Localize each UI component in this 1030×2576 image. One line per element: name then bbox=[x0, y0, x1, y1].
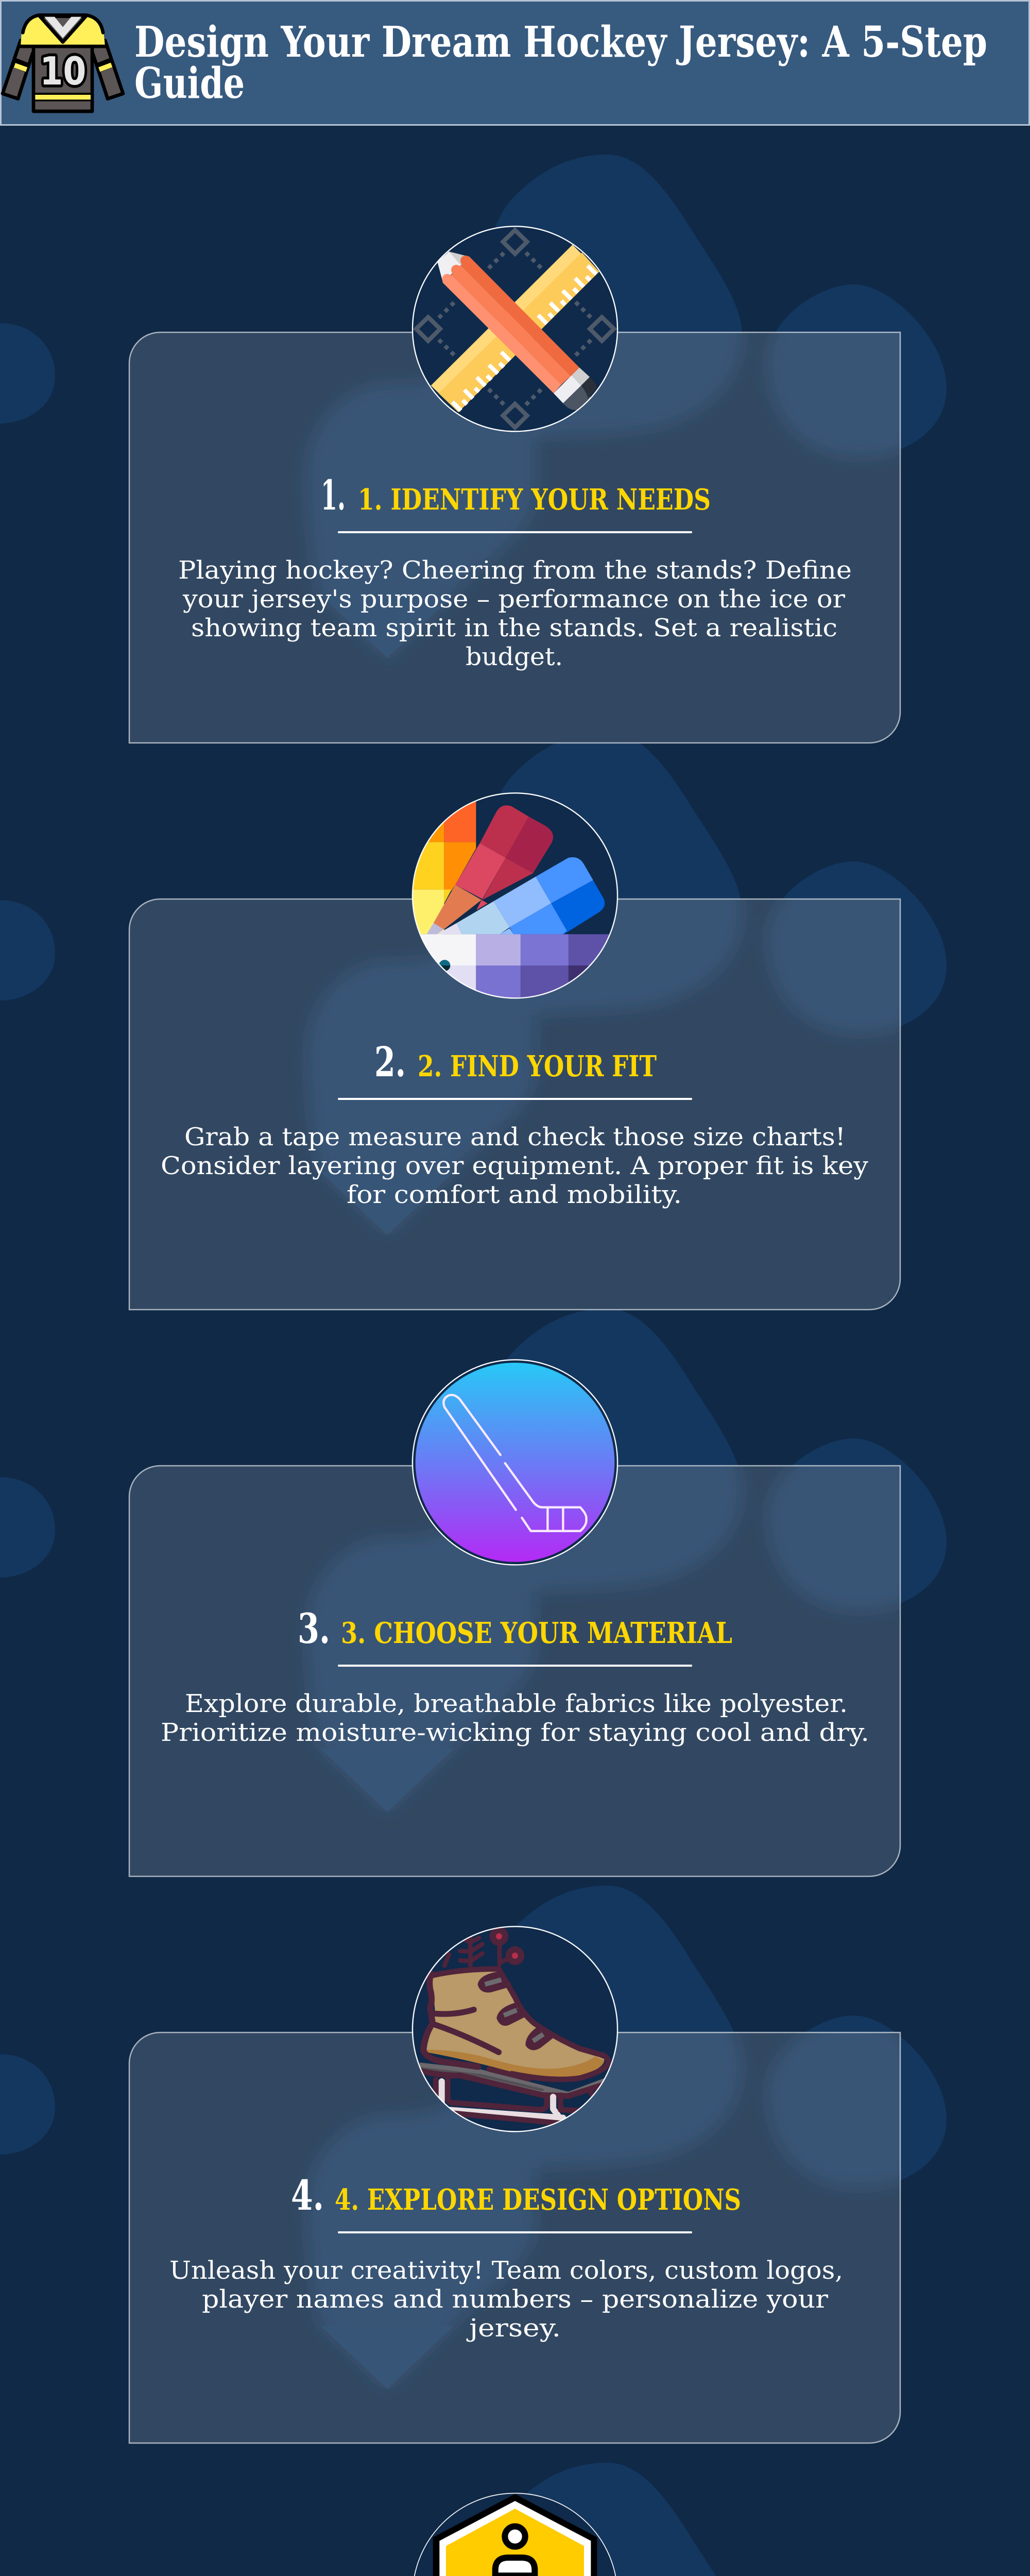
body text 1: your jersey's purpose – performance on the ice or bbox=[182, 585, 845, 614]
body text 4: player names and numbers – personalize your bbox=[202, 2285, 828, 2314]
step 2: find your fit bbox=[129, 792, 901, 1311]
body text 4 bbox=[169, 2256, 843, 2343]
panel 3 bbox=[129, 1465, 901, 1877]
body text 2 bbox=[161, 1123, 868, 1209]
heading 1 bbox=[321, 471, 711, 519]
body text 3: Prioritize moisture-wicking for staying cool and dry. bbox=[161, 1718, 869, 1747]
body text 2: Consider layering over equipment. A proper fit is key bbox=[161, 1151, 868, 1180]
heading 2 bbox=[374, 1038, 657, 1086]
body text 1 bbox=[178, 556, 852, 671]
body text 3 bbox=[161, 1689, 869, 1747]
heading 1: 1. bbox=[321, 471, 346, 519]
jersey number: 10 bbox=[40, 48, 86, 94]
icon: ice skate bbox=[413, 1926, 617, 2131]
panel 1 bbox=[129, 332, 901, 744]
body text 2: for comfort and mobility. bbox=[347, 1180, 682, 1209]
title bbox=[134, 18, 987, 108]
heading 1: 1. IDENTIFY YOUR NEEDS bbox=[358, 483, 711, 517]
icon: hockey jersey bbox=[3, 14, 123, 111]
heading 4: 4. EXPLORE DESIGN OPTIONS bbox=[335, 2183, 741, 2217]
step 4: explore design options bbox=[129, 1926, 901, 2444]
panel 4 bbox=[129, 2032, 901, 2444]
title: Guide bbox=[134, 59, 245, 108]
step 5: care and maintenance bbox=[414, 2493, 616, 2576]
body text 4: Unleash your creativity! Team colors, custom logos, bbox=[169, 2256, 843, 2285]
step 1: identify your needs bbox=[129, 226, 901, 744]
panel 2 bbox=[129, 899, 901, 1311]
heading 3: 3. bbox=[298, 1604, 330, 1653]
icon: hockey stick bbox=[413, 1360, 617, 1565]
body text 4: jersey. bbox=[466, 2314, 561, 2343]
body text 2: Grab a tape measure and check those size charts! bbox=[184, 1123, 846, 1151]
heading 3 bbox=[298, 1604, 732, 1653]
body text 1: budget. bbox=[466, 642, 563, 671]
header bar bbox=[1, 1, 1029, 125]
body text 1: Playing hockey? Cheering from the stands? Define bbox=[178, 556, 852, 585]
icon: hexagon team badge bbox=[413, 2493, 617, 2576]
icon: colour swatches bbox=[412, 793, 618, 999]
heading 2: 2. bbox=[374, 1038, 406, 1086]
body text 1: showing team spirit in the stands. Set a realistic bbox=[191, 614, 837, 642]
heading 4: 4. bbox=[291, 2171, 324, 2219]
body text 3: Explore durable, breathable fabrics like polyester. bbox=[185, 1689, 848, 1718]
icon: pencil and ruler bbox=[413, 226, 617, 431]
heading 3: 3. CHOOSE YOUR MATERIAL bbox=[341, 1616, 732, 1650]
step 3: choose your material bbox=[129, 1359, 901, 1877]
heading 2: 2. FIND YOUR FIT bbox=[418, 1049, 657, 1083]
heading 4 bbox=[291, 2171, 741, 2219]
panel 5 bbox=[129, 2463, 947, 2576]
